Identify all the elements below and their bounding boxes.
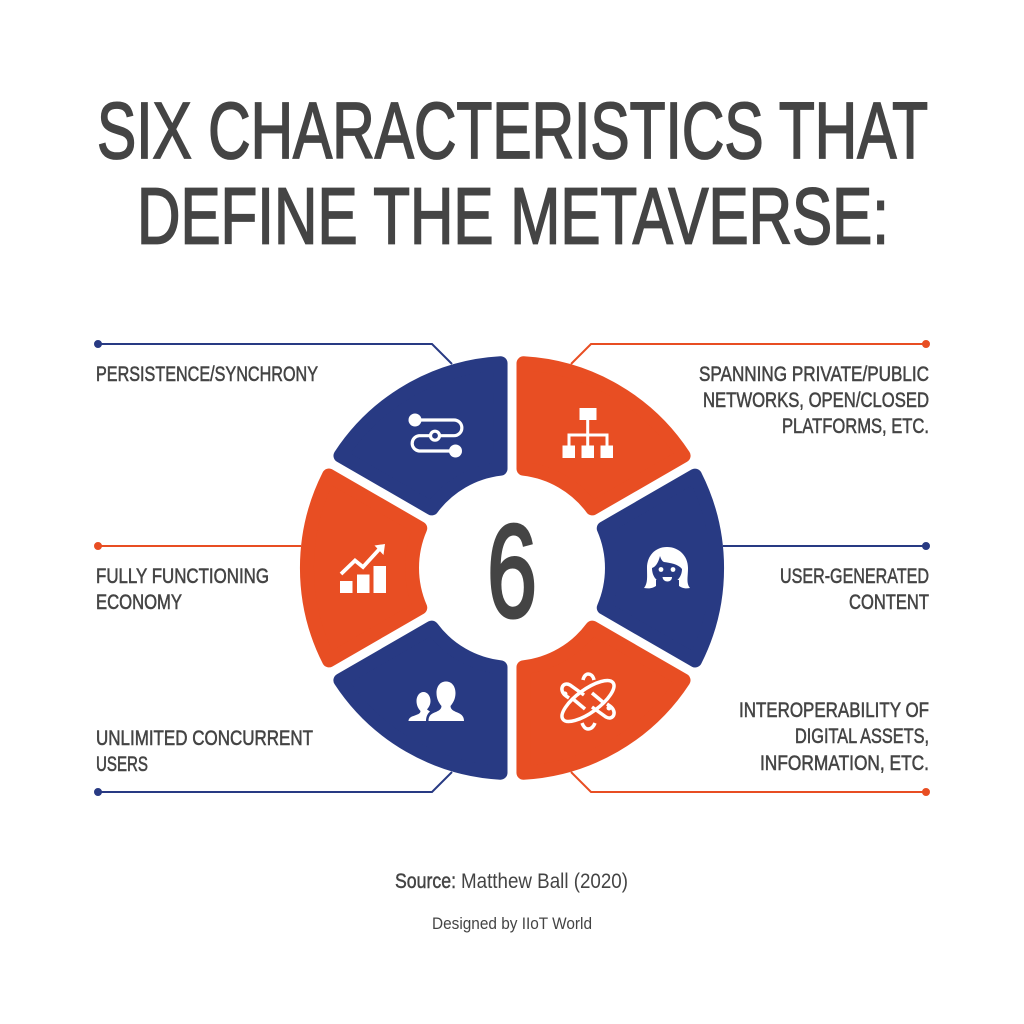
designer credit: Designed by IIoT World [432,914,592,933]
connector: economy [95,543,301,549]
icon: org chart [562,408,613,458]
label: interoperability: INFORMATION, ETC. [760,752,929,775]
icon: girl face [644,547,690,590]
donut of six segments [249,317,775,819]
source line: Matthew Ball (2020) [461,870,628,893]
label: economy [96,565,269,614]
connector: spanning networks [571,341,929,364]
connector: persistence [95,341,452,364]
icon: route path [408,414,462,458]
label: user-generated [780,565,929,614]
segment: spanning networks [524,363,684,508]
label: unlimited users [96,727,313,776]
segment: user-generated content [569,476,775,687]
label: spanning networks: NETWORKS, OPEN/CLOSED [703,389,929,412]
icon: two people [408,682,464,721]
label: interoperability: DIGITAL ASSETS, [795,725,929,748]
label: persistence: PERSISTENCE/SYNCHRONY [96,363,318,386]
label: unlimited users: USERS [96,753,148,776]
connector: interoperability [571,772,929,795]
source line: Source: [395,870,456,893]
connector: unlimited users [95,772,452,795]
segment: interoperability [478,608,684,819]
label: interoperability [739,699,929,775]
label: unlimited users: UNLIMITED CONCURRENT [96,727,313,750]
segment: persistence [340,317,546,528]
label: spanning networks: PLATFORMS, ETC. [782,415,929,438]
label: interoperability: INTEROPERABILITY OF [739,699,929,722]
segment: fully functioning economy [249,449,455,660]
segment: unlimited concurrent users [340,628,500,773]
icon: growth chart [340,544,386,593]
label: spanning networks [699,363,929,438]
label: user-generated: CONTENT [849,591,929,614]
connector: user-generated [723,543,929,549]
icon: atom [556,673,620,729]
label: user-generated: USER-GENERATED [780,565,929,588]
title [97,86,928,260]
center number: 6 [487,498,537,644]
label: economy: FULLY FUNCTIONING [96,565,269,588]
label: spanning networks: SPANNING PRIVATE/PUBLIC [699,363,929,386]
label: economy: ECONOMY [96,591,182,614]
